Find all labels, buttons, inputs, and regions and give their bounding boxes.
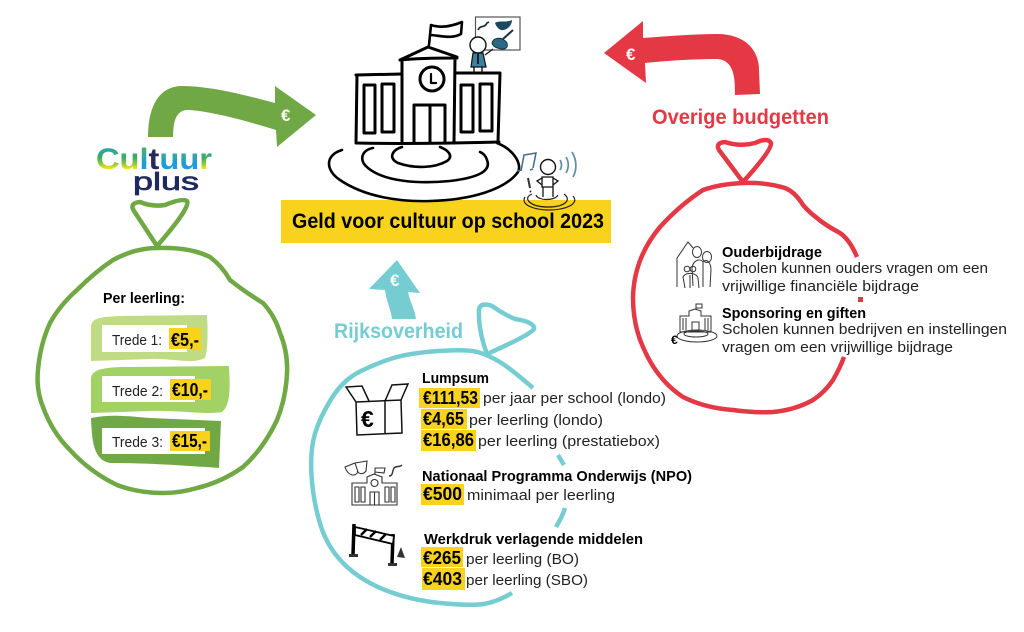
teacher with art board [470, 17, 520, 73]
icon: box with euro [346, 384, 408, 435]
icon: school with euro: € [671, 333, 678, 347]
arrow: Rijksoverheid to school: € [390, 271, 400, 290]
flag [429, 22, 462, 45]
lumpsum text: Lumpsum [422, 370, 489, 387]
werkdruk text: €265 [423, 548, 461, 568]
werkdruk text [421, 531, 643, 590]
heading: per leerling: Per leerling: [103, 290, 185, 307]
icon: school with masks [345, 461, 402, 505]
arrow: Rijksoverheid to school [369, 260, 420, 319]
NPO text: minimaal per leerling [467, 487, 615, 504]
lumpsum text: per leerling (londo) [469, 412, 603, 429]
icon: box with euro: € [361, 406, 374, 432]
tier 2: Trede 2: [112, 383, 163, 400]
sponsoring text: vragen om een vrijwillige bijdrage [722, 339, 953, 356]
bag outline red [633, 140, 857, 412]
bag outline green [38, 200, 287, 493]
bag outline teal [311, 305, 565, 605]
sponsoring text: Scholen kunnen bedrijven en instellingen [722, 321, 1007, 338]
sponsoring text [722, 305, 1007, 356]
icon: family in house [677, 242, 712, 288]
title banner [281, 200, 611, 243]
werkdruk text: per leerling (SBO) [466, 572, 588, 589]
ouderbijdrage text: Scholen kunnen ouders vragen om een [722, 260, 988, 277]
lumpsum text: per jaar per school (londo) [483, 390, 666, 407]
lumpsum text [419, 370, 666, 451]
sponsoring text: Sponsoring en giften [722, 305, 866, 322]
child with sound waves [517, 152, 576, 210]
tier 3: Trede 3: [112, 434, 163, 451]
school building [356, 47, 500, 143]
title banner: Geld voor cultuur op school 2023 [292, 210, 604, 233]
icon: school with euro [671, 304, 717, 347]
school grounds [329, 143, 519, 201]
lumpsum text: per leerling (prestatiebox) [478, 433, 660, 450]
werkdruk text: €403 [423, 569, 462, 589]
icon: barrier [349, 524, 405, 566]
NPO text: €500 [423, 484, 462, 504]
werkdruk text: per leerling (BO) [466, 551, 579, 568]
NPO text [421, 468, 692, 505]
logo: Cultuur plus [96, 143, 212, 196]
tier 2 [91, 366, 230, 413]
logo: Cultuur plus: plus [133, 168, 199, 196]
logo: Cultuur plus: Cultuur [96, 143, 212, 176]
red mark [858, 297, 863, 302]
ouderbijdrage text: Ouderbijdrage [722, 244, 822, 261]
arrow: Cultuurplus to school [148, 86, 316, 147]
ouderbijdrage text: vrijwillige financiële bijdrage [722, 278, 919, 295]
panel: Cultuurplus money bag [38, 200, 287, 493]
tier 3 [91, 416, 221, 468]
heading: Rijksoverheid: Rijksoverheid [334, 320, 463, 343]
NPO text: Nationaal Programma Onderwijs (NPO) [422, 468, 692, 485]
lumpsum text: €4,65 [423, 409, 464, 429]
tier 1 [91, 315, 208, 361]
tier 3: €15,- [172, 431, 207, 451]
arrow: overige budgetten to school: € [626, 45, 636, 64]
arrow: overige budgetten to school [604, 21, 760, 95]
arrow: Cultuurplus to school: € [281, 106, 291, 125]
werkdruk text: Werkdruk verlagende middelen [424, 531, 643, 548]
tier 1: €5,- [171, 330, 199, 350]
lumpsum text: €16,86 [423, 430, 474, 450]
panel: overige budgetten money bag [633, 140, 1007, 412]
heading: Overige budgetten: Overige budgetten [652, 106, 829, 129]
tier 2: €10,- [172, 380, 208, 400]
tier 1: Trede 1: [112, 332, 162, 349]
central school illustration [329, 17, 576, 210]
panel: Rijksoverheid money bag [311, 305, 692, 605]
ouderbijdrage text [722, 244, 988, 295]
lumpsum text: €111,53 [423, 388, 478, 408]
